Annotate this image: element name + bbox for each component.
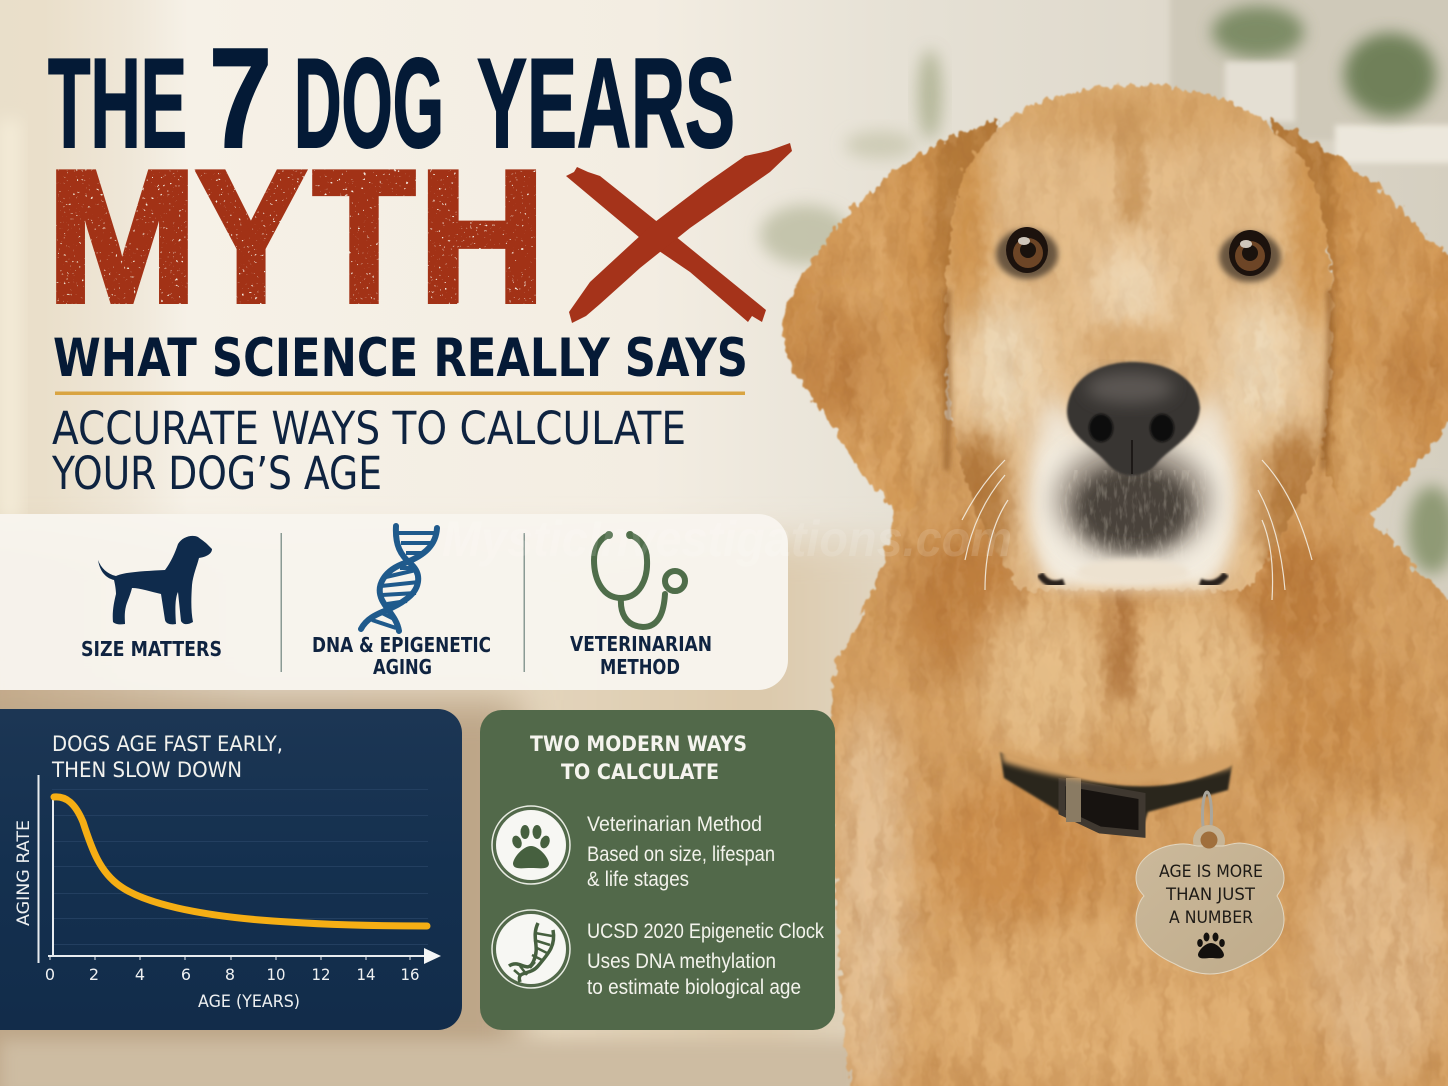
collar	[1000, 745, 1235, 835]
title: the 7 dog years: DOG	[294, 32, 444, 174]
x axis numbers: 16	[400, 965, 420, 984]
method: veterinarian: Veterinarian Method	[587, 813, 762, 836]
grid lines	[52, 790, 428, 944]
subheading: accurate ways to calculate your dog's age: YOUR DOG’S AGE	[51, 447, 382, 500]
axes	[38, 775, 425, 963]
left ear	[780, 116, 1000, 510]
chart heading: DOGS AGE FAST EARLY,	[52, 732, 283, 756]
axis arrow	[424, 948, 441, 964]
left eye	[996, 227, 1058, 279]
name tag: age is more than just a number: AGE IS MORE	[1159, 862, 1263, 882]
name tag: age is more than just a number	[1136, 825, 1284, 974]
label: dna and epigenetic aging: DNA & EPIGENETIC	[312, 633, 491, 657]
label: veterinarian method: VETERINARIAN	[570, 632, 712, 656]
icon: dna helix	[361, 526, 437, 631]
method: epigenetic clock: UCSD 2020 Epigenetic Clock	[587, 920, 824, 943]
panel: three factors	[0, 514, 788, 690]
name tag: age is more than just a number: A NUMBER	[1169, 908, 1253, 928]
gold divider line	[55, 392, 745, 395]
method: epigenetic clock: Uses DNA methylation	[587, 950, 776, 973]
label: dna and epigenetic aging	[312, 633, 491, 679]
label: dna and epigenetic aging: AGING	[373, 655, 432, 679]
chart heading: THEN SLOW DOWN	[51, 758, 242, 782]
name tag: age is more than just a number: THAN JUST	[1165, 885, 1256, 905]
title: myth: M	[47, 132, 197, 341]
x axis numbers: 6	[181, 965, 191, 984]
title: myth: T	[313, 132, 415, 341]
chart heading	[51, 732, 283, 782]
title: the 7 dog years: YEARS	[477, 32, 735, 174]
muzzle	[1028, 390, 1237, 585]
panel heading: TO CALCULATE	[561, 760, 719, 784]
right ear	[1270, 116, 1448, 514]
label: veterinarian method	[570, 632, 712, 679]
watermark: MysticInvestigations.com	[442, 511, 1012, 567]
y axis label: AGING RATE	[14, 820, 34, 926]
subtitle: what science really says: WHAT SCIENCE REALLY SAYS	[53, 328, 748, 389]
method: veterinarian: Based on size, lifespan	[587, 843, 775, 866]
title: the 7 dog years: THE	[48, 32, 187, 174]
icon: dog silhouette	[98, 536, 212, 624]
x axis label: AGE (YEARS)	[198, 992, 300, 1011]
title: the 7 dog years: 7	[209, 19, 272, 178]
golden retriever portrait	[770, 70, 1448, 1086]
title: the 7 dog years	[48, 19, 735, 178]
collar ring	[1202, 792, 1212, 838]
method: epigenetic clock	[587, 920, 824, 999]
label: veterinarian method: METHOD	[600, 655, 680, 679]
label: size matters: SIZE MATTERS	[81, 637, 222, 661]
x axis numbers: 12	[312, 965, 330, 984]
x axis numbers: 4	[135, 965, 145, 984]
x axis numbers: 0	[45, 965, 55, 984]
x axis numbers	[45, 965, 420, 984]
x axis numbers: 2	[89, 965, 99, 984]
panel heading	[530, 732, 747, 784]
icon: red brush x	[566, 143, 792, 323]
icon: stethoscope	[594, 533, 685, 627]
panel: aging curve chart	[0, 709, 462, 1030]
right eye	[1219, 230, 1281, 282]
x axis numbers: 8	[225, 965, 235, 984]
title: myth: Y	[196, 132, 306, 341]
icon: paw badge	[492, 806, 570, 884]
x axis numbers: 10	[266, 965, 286, 984]
method: veterinarian: & life stages	[587, 868, 689, 891]
x axis numbers: 14	[356, 965, 376, 984]
title: myth	[47, 132, 545, 341]
ear folds shadow	[946, 290, 1330, 470]
icon: dna badge	[492, 910, 570, 988]
curve: aging rate	[54, 797, 427, 926]
nose	[1067, 362, 1200, 476]
body fur	[820, 400, 1448, 1086]
subheading: accurate ways to calculate your dog's age	[51, 402, 686, 500]
method: epigenetic clock: to estimate biological age	[587, 976, 801, 999]
method: veterinarian	[587, 813, 775, 891]
title: myth: H	[419, 132, 545, 341]
dog body, chest and ears fur	[770, 70, 1448, 1086]
panel heading: TWO MODERN WAYS	[530, 732, 747, 756]
icon: paw on tag	[1197, 932, 1225, 958]
subheading: accurate ways to calculate your dog's age: ACCURATE WAYS TO CALCULATE	[52, 402, 686, 455]
whiskers	[962, 460, 1312, 600]
panel: two modern ways to calculate	[480, 710, 835, 1030]
head fur	[930, 70, 1350, 600]
